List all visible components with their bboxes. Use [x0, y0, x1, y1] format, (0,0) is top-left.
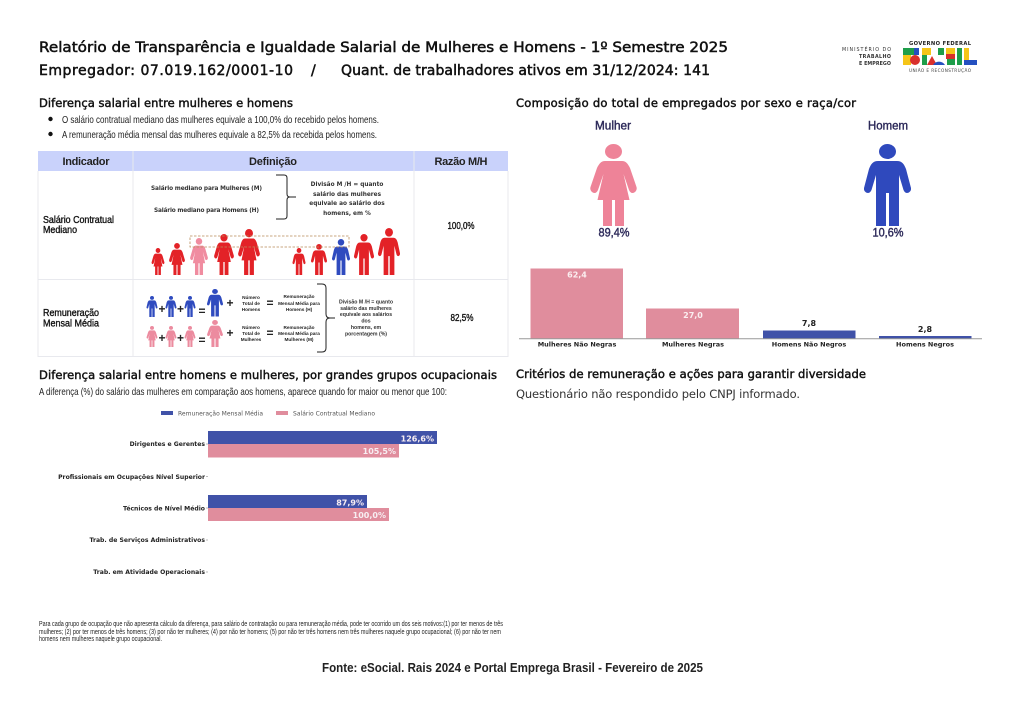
logo: ministério do trabalho e emprego: E EMPREGO	[859, 61, 891, 67]
footnote: Para cada grupo de ocupação que não apresenta cálculo da diferença, para salário de contratação ou para remuneração média, pode ter ocorrido um dos seis motivos:(1) por ter menos de três	[39, 621, 503, 628]
row: salário contratual mediano: equivale ao salário dos	[309, 200, 385, 207]
row: remuneração mensal média: +	[226, 326, 234, 340]
bar chart: grupos ocupacionais: 100,0%	[353, 511, 386, 520]
heading: critérios: Critérios de remuneração e ações para garantir diversidade	[516, 367, 866, 381]
panel: indicator table	[38, 151, 508, 356]
icons: women equation	[147, 320, 223, 347]
logo: ministério do trabalho e emprego: TRABALHO	[859, 54, 891, 60]
heading: diferença salarial: Diferença salarial entre mulheres e homens	[39, 96, 293, 110]
panel: mulher	[590, 120, 637, 240]
row: salário contratual mediano: Divisão M /H = quanto	[311, 182, 383, 188]
panel: mulher: Mulher	[595, 120, 631, 132]
row: remuneração mensal média: porcentagem (%)	[345, 332, 387, 338]
heading: composição: Composição do total de empregados por sexo e raça/cor	[516, 96, 856, 110]
row: remuneração mensal média: Mensal Média	[43, 318, 99, 330]
footnote: homens nem mulheres naquele grupo ocupacional.	[39, 636, 162, 643]
row: remuneração mensal média: =	[198, 333, 206, 347]
title: Quant. de trabalhadores ativos em 31/12/2024: 141	[341, 63, 710, 79]
bar chart: grupos ocupacionais: 105,5%	[363, 447, 396, 456]
row: remuneração mensal média: +	[226, 296, 234, 310]
row: remuneração mensal média: Remuneração	[283, 325, 315, 330]
row: remuneração mensal média: equivale aos salários	[340, 312, 392, 318]
bar chart: sexo e raça/cor: Homens Negros	[896, 340, 954, 348]
row: remuneração mensal média: homens, em	[351, 325, 382, 331]
bar chart: sexo e raça/cor	[519, 268, 982, 348]
panel: homem: 10,6%	[872, 228, 904, 240]
row: remuneração mensal média: +	[177, 331, 184, 345]
icons: women salary ordering	[152, 229, 260, 275]
bar chart: sexo e raça/cor: 7,8	[802, 319, 817, 328]
row: remuneração mensal média: =	[266, 296, 274, 310]
icons: men equation	[146, 289, 223, 317]
row: salário contratual mediano: Salário mediano para Homens (H)	[154, 207, 259, 214]
bar chart: sexo e raça/cor: 2,8	[918, 325, 933, 334]
row: remuneração mensal média: Mensal Média para	[278, 331, 320, 336]
table header: Razão M/H	[434, 156, 488, 168]
row: salário contratual mediano: Salário mediano para Mulheres (M)	[151, 185, 262, 192]
table header: Indicador	[62, 156, 110, 168]
bar chart: grupos ocupacionais: Dirigentes e Gerentes	[130, 441, 205, 448]
row: salário contratual mediano: salário das mulheres	[313, 191, 382, 198]
row: remuneração mensal média: +	[158, 331, 166, 345]
logo: governo federal brasil	[903, 41, 977, 73]
bar chart: sexo e raça/cor: 62,4	[567, 270, 587, 280]
source: Fonte: eSocial. Rais 2024 e Portal Emprega Brasil - Fevereiro de 2025	[322, 661, 703, 675]
row: salário contratual mediano: homens, em %	[323, 211, 371, 217]
bar chart: grupos ocupacionais: Trab. em Atividade Operacionais	[93, 569, 205, 576]
heading: grupos ocupacionais: Diferença salarial entre homens e mulheres, por grandes grupos ocupacionais	[39, 368, 497, 382]
row: remuneração mensal média: Mulheres	[241, 337, 262, 342]
title: Relatório de Transparência e Igualdade Salarial de Mulheres e Homens - 1º Semestre 2025	[39, 40, 728, 56]
bullet list	[48, 114, 379, 141]
row: remuneração mensal média: 82,5%	[450, 313, 474, 324]
logo: ministério do trabalho e emprego: MINISTÉRIO DO	[842, 45, 891, 53]
logo: ministério do trabalho e emprego	[842, 45, 891, 67]
row: remuneração mensal média: Número	[242, 295, 260, 300]
row: salário contratual mediano: 100,0%	[448, 221, 475, 232]
row: remuneração mensal média: Número	[242, 325, 260, 330]
legend	[161, 410, 375, 418]
bar chart: grupos ocupacionais: Profissionais em Ocupações Nível Superior	[58, 473, 205, 481]
row: remuneração mensal média	[43, 284, 474, 352]
bar chart: grupos ocupacionais	[58, 431, 437, 576]
text: questionário: Questionário não respondido pelo CNPJ informado.	[516, 387, 800, 401]
row: remuneração mensal média: =	[198, 304, 206, 318]
row: remuneração mensal média: Divisão M /H = quanto	[339, 300, 393, 306]
row: remuneração mensal média: Mulheres (M)	[285, 337, 314, 342]
icon: woman	[590, 144, 637, 226]
logo: governo federal brasil: UNIÃO E RECONSTRUÇÃO	[909, 68, 972, 73]
panel: homem: Homem	[868, 120, 908, 132]
icon: man	[864, 144, 911, 226]
row: remuneração mensal média: Remuneração	[283, 294, 315, 299]
row: remuneração mensal média: =	[266, 326, 274, 340]
bar chart: grupos ocupacionais: 126,6%	[401, 434, 434, 444]
bullet list: A remuneração média mensal das mulheres equivale a 82,5% da recebida pelos homens.	[62, 129, 377, 141]
row: remuneração mensal média: Homens (H)	[286, 307, 313, 312]
title: /	[311, 63, 316, 79]
row: remuneração mensal média: salário das mulheres	[340, 306, 392, 312]
icons: men salary ordering	[292, 228, 400, 275]
table header: Definição	[249, 156, 297, 168]
row: remuneração mensal média: dos	[361, 318, 371, 324]
row: salário contratual mediano: Mediano	[43, 225, 77, 236]
title	[39, 40, 728, 79]
logo: governo federal brasil: GOVERNO FEDERAL	[909, 41, 972, 47]
bullet list: O salário contratual mediano das mulheres equivale a 100,0% do recebido pelos homens.	[62, 114, 379, 126]
legend: Remuneração Mensal Média	[178, 410, 263, 418]
row: remuneração mensal média: Homens	[242, 307, 261, 312]
row: remuneração mensal média: Total de	[242, 331, 260, 336]
panel: mulher: 89,4%	[598, 228, 630, 240]
bar chart: sexo e raça/cor: Mulheres Não Negras	[538, 340, 616, 348]
row: remuneração mensal média: Total de	[242, 301, 260, 306]
title: Empregador: 07.019.162/0001-10	[39, 63, 293, 79]
row: remuneração mensal média: Remuneração	[43, 308, 99, 319]
table header	[62, 156, 488, 168]
footnote: mulheres; (2) por ter menos de três homens; (3) por não ter mulheres; (4) por não ter homens; (5) por não ter três homens nem três mulheres naquele grupo ocupacional; (6) por não ter nem	[39, 629, 501, 636]
bar chart: sexo e raça/cor: 27,0	[683, 311, 703, 320]
bar chart: sexo e raça/cor: Homens Não Negros	[772, 340, 846, 348]
legend: Salário Contratual Mediano	[293, 410, 375, 418]
bar chart: grupos ocupacionais: 87,9%	[336, 498, 364, 508]
row: salário contratual mediano	[43, 175, 475, 275]
row: remuneração mensal média: +	[158, 302, 166, 316]
row: salário contratual mediano: Salário Contratual	[43, 215, 114, 226]
text: subtítulo: A diferença (%) do salário das mulheres em comparação aos homens, aparece quando for maior ou menor que 100:	[39, 386, 447, 398]
bar chart: grupos ocupacionais: Técnicos de Nível Médio	[123, 504, 205, 512]
panel: homem	[864, 120, 911, 240]
row: remuneração mensal média: +	[177, 302, 184, 316]
row: remuneração mensal média: Mensal Média para	[278, 301, 320, 306]
bar chart: grupos ocupacionais: Trab. de Serviços Administrativos	[89, 537, 205, 544]
footnote	[39, 621, 503, 643]
bar chart: sexo e raça/cor: Mulheres Negras	[662, 340, 724, 348]
